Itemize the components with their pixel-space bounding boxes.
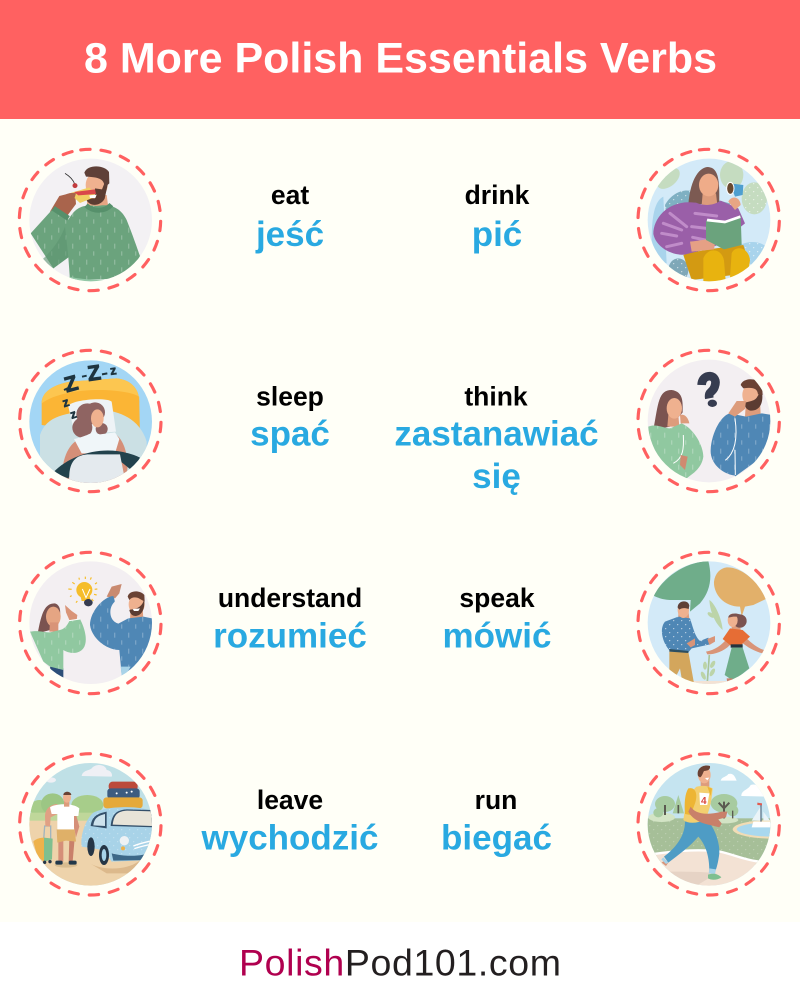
translation: zastanawiać się [394, 415, 599, 496]
icon: woman sleeping [18, 348, 163, 494]
footer logo: PolishPod101.com [239, 942, 561, 984]
footer band [0, 922, 800, 1000]
label: understand: understand [218, 583, 362, 613]
icon: man with suitcase beside packed car [18, 752, 163, 897]
icon: man and woman with lightbulb idea [18, 550, 163, 696]
translation: zastanawiać się: zastanawiać [394, 415, 599, 454]
icon: woman reading and drinking [636, 148, 781, 292]
icon: man and woman thinking [636, 348, 781, 494]
translation: jeść: jeść [255, 215, 324, 254]
icon: woman sleeping: Z [62, 371, 81, 397]
translation: mówić: mówić [443, 616, 551, 656]
label: drink: drink [465, 180, 530, 210]
label: think: think [464, 382, 528, 412]
translation: zastanawiać się: się [472, 457, 521, 496]
translation: biegać: biegać [441, 818, 552, 858]
title: 8 More Polish Essentials Verbs [84, 34, 717, 82]
icon: woman sleeping: z [61, 395, 71, 410]
icon: man running in a park [636, 752, 781, 897]
icon: man and woman speaking with speech bubbles [636, 550, 781, 696]
icon: woman sleeping: Z [86, 360, 102, 386]
translation: pić: pić [472, 215, 522, 254]
label: leave: leave [257, 785, 323, 815]
translation: wychodzić: wychodzić [201, 818, 378, 858]
icon: man running in a park: 4 [701, 796, 707, 807]
header band [0, 0, 800, 119]
icon: woman sleeping: z [68, 407, 78, 422]
translation: spać: spać [250, 415, 330, 454]
icon: woman sleeping: z [109, 363, 117, 378]
translation: rozumieć: rozumieć [213, 616, 367, 656]
label: run: run [475, 785, 517, 815]
label: speak: speak [459, 583, 535, 613]
icon: man eating a hot dog [18, 148, 162, 292]
label: eat: eat [271, 180, 309, 210]
label: sleep: sleep [256, 382, 324, 412]
